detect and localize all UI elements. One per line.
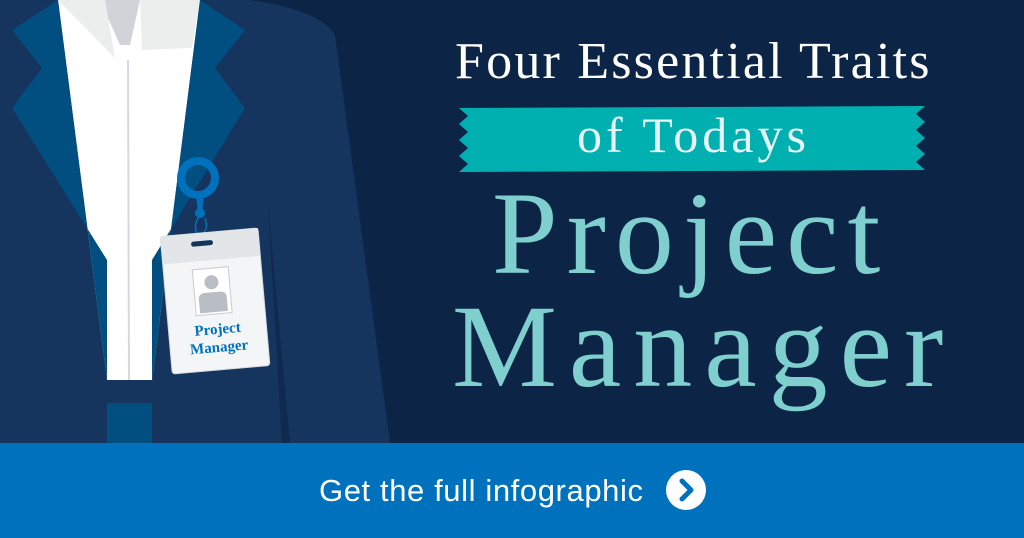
badge clip [181, 161, 215, 236]
badge card: Manager [189, 337, 249, 358]
lapels [12, 0, 245, 380]
illustration: jacket with badge [0, 0, 390, 443]
shirt [58, 0, 200, 380]
placket [107, 403, 152, 443]
bottom bar: call to action [0, 443, 1024, 538]
badge card [160, 228, 270, 374]
heading: Project: Project [492, 168, 889, 299]
ribbon: of Todays: of Todays [577, 107, 810, 163]
ribbon: of Todays [459, 106, 925, 172]
icon: arrow circle [666, 470, 706, 510]
CTA text: Get the full infographic [319, 473, 644, 508]
heading: Manager: Manager [452, 281, 955, 412]
title: Four Essential Traits: Four Essential Traits [455, 33, 932, 90]
badge card: Project [194, 320, 241, 340]
jacket body [0, 0, 390, 443]
